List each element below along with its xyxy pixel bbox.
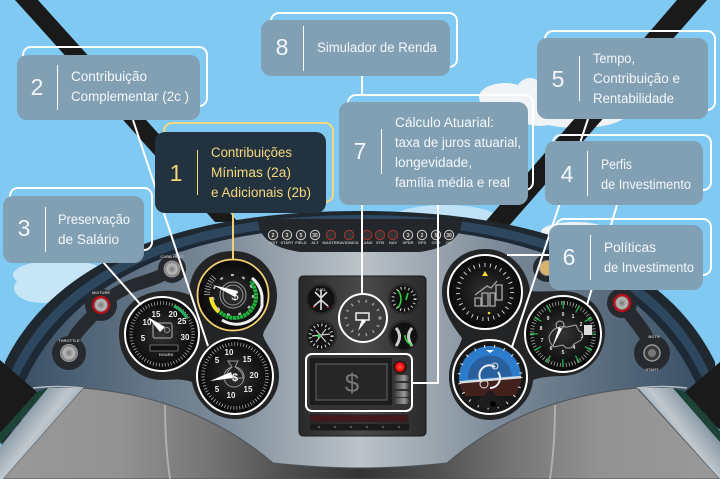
dashboard xyxy=(0,211,720,479)
gauge 3: preservação: 10 xyxy=(143,318,152,327)
switch strip: ALT xyxy=(311,240,319,245)
gauge 3: preservação: 5 xyxy=(141,334,146,343)
callout 1: 1 xyxy=(170,160,182,186)
red display xyxy=(310,415,408,422)
gauge 4: perfis: 0 xyxy=(562,312,565,318)
callout 7 xyxy=(339,95,533,205)
callout 7: família média e real xyxy=(395,175,510,190)
knob: voltage xyxy=(533,254,561,282)
callout 2: 2 xyxy=(31,74,43,100)
left tube xyxy=(0,388,83,479)
callout 1: Mínimas (2a) xyxy=(211,165,291,180)
gauge 2: contribuição complementar: $ xyxy=(232,372,238,384)
switch strip: GPS xyxy=(418,240,427,245)
switch strip: 3 xyxy=(286,233,289,239)
gauge 3: preservação: HOURS xyxy=(159,352,174,357)
gauge 4: perfis: 2 xyxy=(580,322,583,328)
right knob band: BOTH xyxy=(648,334,660,339)
knob: mixture xyxy=(93,297,109,313)
knob: red xyxy=(614,295,630,311)
callout 7: longevidade, xyxy=(395,155,472,170)
gauge 1: contribuições xyxy=(198,260,268,330)
instrument stack xyxy=(299,276,426,436)
right gauge housing xyxy=(442,249,605,420)
callout 8 xyxy=(261,13,457,76)
switch strip: 2 xyxy=(272,233,275,239)
gauge 4: perfis: 9 xyxy=(547,316,550,322)
knob: ignition xyxy=(644,345,660,361)
switch strip: 3 xyxy=(407,233,410,239)
callout 5: 5 xyxy=(552,66,564,92)
callout 4 xyxy=(545,135,711,205)
knob: throttle xyxy=(60,344,78,362)
small gauge: fuel xyxy=(305,283,337,315)
gauge 3: preservação: 30 xyxy=(181,333,190,342)
left knob band: CARB HEAT xyxy=(160,254,184,259)
gauge 4: perfis: 4 xyxy=(573,345,576,351)
right tube xyxy=(638,388,720,479)
gauge 3: preservação: 20 xyxy=(169,310,178,319)
gauge 4: perfis: 1 xyxy=(572,314,575,320)
switch strip: 5 xyxy=(435,233,438,239)
small gauge: right top xyxy=(388,283,420,315)
switch strip: INST xyxy=(268,240,278,245)
left green trim xyxy=(0,388,48,444)
switch strip: LAND xyxy=(361,240,373,245)
callout 8: Simulador de Renda xyxy=(317,40,437,55)
left panel lip xyxy=(33,386,83,388)
seat area xyxy=(3,388,720,479)
switch strip: XPDR xyxy=(402,240,414,245)
switch strip: STB xyxy=(376,240,384,245)
gauge 4: perfis: 3 xyxy=(581,334,584,340)
left corner post xyxy=(0,360,37,433)
callout 6: Políticas xyxy=(604,240,656,255)
gauge 2: contribuição complementar: 5 xyxy=(215,356,220,365)
connector lines xyxy=(103,76,617,383)
callout 4: de Investimento xyxy=(601,177,691,192)
gauge 1: contribuições: $ xyxy=(231,288,239,303)
left gauge housing xyxy=(119,251,279,419)
left knob band: MIXTURE xyxy=(92,290,110,295)
right green trim xyxy=(673,388,720,442)
gauge 2: contribuição complementar: 15 xyxy=(244,385,253,394)
callout 6: de Investimento xyxy=(604,260,694,275)
callout 2: Complementar (2c ) xyxy=(71,89,189,104)
switch strip: ON xyxy=(446,240,452,245)
left knob band: THROTTLE xyxy=(58,338,80,343)
callout 3: 3 xyxy=(18,215,30,241)
switch strip xyxy=(258,219,462,252)
switch strip: 30 xyxy=(312,233,318,239)
gauge 2: contribuição complementar: 10 xyxy=(225,348,234,357)
gauge 4: perfis: 5 xyxy=(562,350,565,356)
right corner post xyxy=(685,362,720,430)
callout 7: taxa de juros atuarial, xyxy=(395,135,521,150)
central gauge xyxy=(339,294,387,342)
gauge 2: contribuição complementar: 5 xyxy=(215,385,220,394)
callout 6: 6 xyxy=(563,244,575,270)
left knob band xyxy=(52,254,186,370)
callout 3 xyxy=(3,188,152,263)
callout 3: de Salário xyxy=(58,232,119,247)
gauge 4: perfis: 8 xyxy=(540,326,543,332)
callout 4: Perfis xyxy=(601,157,632,172)
callout 2 xyxy=(17,47,207,120)
gauge 4: perfis: 6 xyxy=(550,346,553,352)
gauge 6: políticas xyxy=(448,255,522,329)
switch strip: NAV xyxy=(389,240,397,245)
callout 5: Contribuição e xyxy=(593,71,680,86)
right window strut xyxy=(480,0,707,228)
gauge 4: perfis xyxy=(525,296,601,372)
callout 5 xyxy=(537,31,715,119)
gauge 2: contribuição complementar: 10 xyxy=(227,391,236,400)
small gauge: right bottom xyxy=(388,320,420,352)
gauge 5: tempo horizon xyxy=(453,340,527,414)
callout 3: Preservação xyxy=(58,212,130,227)
switch strip: MASTER xyxy=(323,240,340,245)
switch strip: 30 xyxy=(446,233,452,239)
gauge 3: preservação: 15 xyxy=(152,310,161,319)
screen xyxy=(306,354,412,411)
switch strip: START xyxy=(280,240,294,245)
callout 7: Cálculo Atuarial: xyxy=(395,115,494,130)
callout 7: 7 xyxy=(354,138,366,164)
gauge 3: preservação xyxy=(125,297,199,371)
switch strip: FIELD xyxy=(295,240,307,245)
small gauge: fuel: FUEL xyxy=(316,287,327,292)
left window strut xyxy=(15,0,238,222)
right knob band xyxy=(533,254,670,372)
screen: $ xyxy=(345,368,360,398)
switch strip: COD xyxy=(432,240,441,245)
callout 5: Tempo, xyxy=(593,51,635,66)
callout 4: 4 xyxy=(561,161,574,187)
callout 1 xyxy=(155,123,333,213)
right knob band: START xyxy=(645,367,659,372)
small gauge: left bottom xyxy=(305,320,337,352)
callout 8: 8 xyxy=(276,34,288,60)
switch strip: 2 xyxy=(421,233,424,239)
callout 6 xyxy=(549,219,711,290)
callout 1: Contribuições xyxy=(211,145,292,160)
callout 1: e Adicionais (2b) xyxy=(211,185,311,200)
clouds xyxy=(13,78,627,303)
button row xyxy=(310,424,409,430)
connector: yellow line xyxy=(232,213,234,259)
right panel lip xyxy=(637,386,687,388)
gauge 4: perfis: 7 xyxy=(541,338,544,344)
callout 2: Contribuição xyxy=(71,69,147,84)
switch strip: 5 xyxy=(300,233,303,239)
callout 5: Rentabilidade xyxy=(593,91,674,106)
knob: carb heat xyxy=(164,261,180,277)
gauge 2: contribuição complementar xyxy=(197,338,273,414)
gauge 2: contribuição complementar: 15 xyxy=(243,355,252,364)
gauge 3: preservação: 25 xyxy=(178,317,187,326)
switch strip: AVIONICS xyxy=(339,240,359,245)
gauge 2: contribuição complementar: 20 xyxy=(250,371,259,380)
